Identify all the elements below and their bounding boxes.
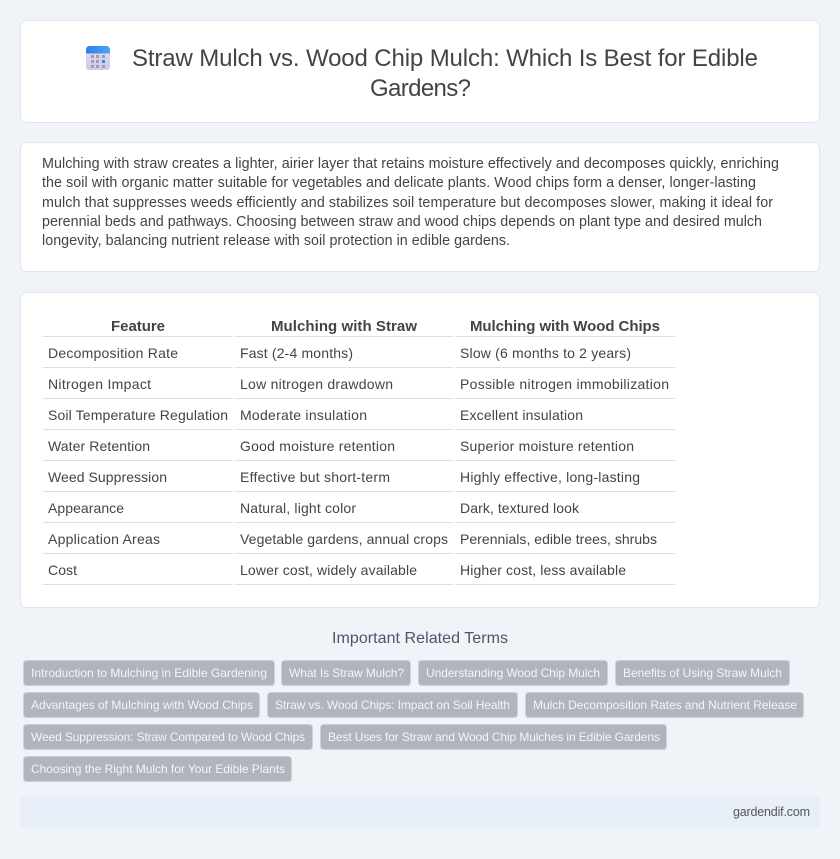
panel: title card (20, 20, 820, 123)
table rows: Highly effective, long-lasting (460, 469, 640, 485)
table rows: Higher cost, less available (460, 562, 626, 578)
table header (111, 318, 660, 335)
intro paragraph: the soil with organic matter suitable for vegetables and delicate plants. Wood chips form a denser, longer-lasting (42, 175, 756, 191)
table rows: Effective but short-term (240, 469, 390, 485)
related term tags: What Is Straw Mulch? (289, 666, 404, 680)
table rows: Good moisture retention (240, 438, 395, 454)
table rows: Superior moisture retention (460, 438, 634, 454)
table rows: Nitrogen Impact (48, 376, 151, 392)
related term tags: Best Uses for Straw and Wood Chip Mulches in Edible Gardens (328, 730, 660, 744)
table header: Mulching with Straw (271, 318, 417, 335)
table header: Mulching with Wood Chips (470, 318, 660, 335)
table rows: Weed Suppression (48, 469, 167, 485)
related term tags: Introduction to Mulching in Edible Gardening (31, 666, 267, 680)
intro paragraph (42, 156, 779, 249)
table rows: Vegetable gardens, annual crops (240, 531, 448, 547)
table rows: Lower cost, widely available (240, 562, 417, 578)
related term tags: Understanding Wood Chip Mulch (426, 666, 600, 680)
title: Gardens? (370, 75, 471, 102)
table rows: Possible nitrogen immobilization (460, 376, 669, 392)
intro paragraph: perennial beds and pathways. Choosing between straw and wood chips depends on plant type and desired mulch (42, 214, 762, 230)
intro paragraph: Mulching with straw creates a lighter, airier layer that retains moisture effectively and decomposes quickly, enriching (42, 156, 779, 172)
related term tags: Benefits of Using Straw Mulch (623, 666, 782, 680)
table rows: Perennials, edible trees, shrubs (460, 531, 657, 547)
table rows: Decomposition Rate (48, 345, 178, 361)
related term tags: Mulch Decomposition Rates and Nutrient Release (533, 698, 797, 712)
panel: intro text (20, 142, 820, 272)
icon: calendar (86, 46, 110, 70)
table rows: Water Retention (48, 438, 150, 454)
panel: comparison table (20, 292, 820, 608)
table rows (48, 345, 669, 578)
table rows: Cost (48, 562, 77, 578)
table rows: Soil Temperature Regulation (48, 407, 228, 423)
related term tags (23, 660, 804, 782)
table rows: Moderate insulation (240, 407, 367, 423)
related term tags: Weed Suppression: Straw Compared to Wood Chips (31, 730, 305, 744)
table rows: Slow (6 months to 2 years) (460, 345, 631, 361)
table rows: Fast (2-4 months) (240, 345, 353, 361)
table rows: Excellent insulation (460, 407, 583, 423)
title: Straw Mulch vs. Wood Chip Mulch: Which Is Best for Edible (132, 45, 758, 72)
table rows: Natural, light color (240, 500, 356, 516)
related term tags: Choosing the Right Mulch for Your Edible Plants (31, 762, 285, 776)
related term tags: Advantages of Mulching with Wood Chips (31, 698, 253, 712)
footer source: gardendif.com (733, 805, 810, 819)
table rows: Dark, textured look (460, 500, 580, 516)
intro paragraph: longevity, balancing nutrient release with soil protection in edible gardens. (42, 233, 510, 249)
table rows: Appearance (48, 500, 124, 516)
table rows: Low nitrogen drawdown (240, 376, 393, 392)
table rows: Application Areas (48, 531, 160, 547)
intro paragraph: mulch that suppresses weeds efficiently and stabilizes soil temperature but decomposes slower, making it ideal for (42, 195, 773, 211)
heading: related terms: Important Related Terms (332, 630, 508, 647)
related term tags: Straw vs. Wood Chips: Impact on Soil Health (275, 698, 510, 712)
footer bar (20, 795, 820, 829)
title (132, 45, 758, 102)
table header: Feature (111, 318, 165, 335)
comparison table (43, 318, 675, 585)
